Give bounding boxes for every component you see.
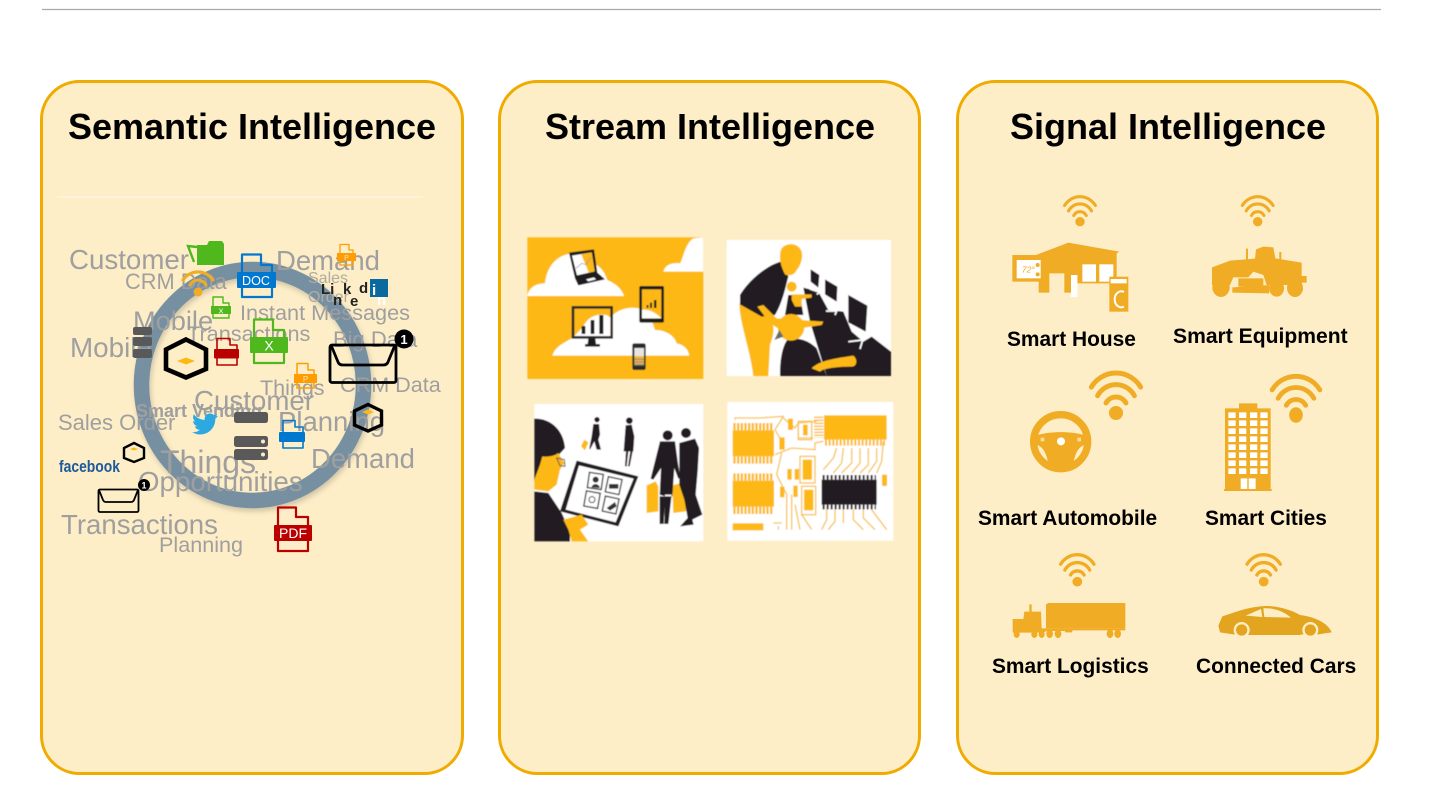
icon: LinkedIn scattered letters: k: [343, 281, 352, 298]
icon: office tower: [1224, 403, 1272, 491]
word cloud of data terms: Transactions: [187, 321, 311, 346]
icon: smart house: [1012, 243, 1128, 312]
icon: DOC file: DOC: [242, 273, 270, 288]
word cloud of data terms: Things: [160, 444, 256, 480]
word cloud of data terms: Customer: [69, 244, 189, 275]
word cloud of data terms: Transactions: [61, 509, 218, 540]
icon: smart equipment grader: [1212, 247, 1307, 297]
illustration: devices in the cloud: [527, 237, 703, 379]
panel: Semantic Intelligence: [42, 82, 462, 774]
illustration: tablet user and shoppers: [534, 404, 703, 541]
icon: large Excel file: [250, 320, 288, 363]
word cloud of data terms: Things: [260, 376, 325, 400]
icon: facebook wordmark: facebook: [59, 457, 120, 476]
icon: large hexagon: [166, 340, 206, 378]
label: Smart Equipment: Smart Equipment: [1173, 325, 1348, 348]
icon: wifi above house: [1065, 197, 1095, 226]
icon: DOC file: [237, 254, 276, 297]
word cloud of data terms: Demand: [276, 245, 380, 276]
icon: blue file: [279, 420, 305, 448]
icon: green briefcase: [188, 241, 224, 265]
word cloud of data terms: Instant Messages: [240, 300, 410, 325]
label: Smart Logistics: Smart Logistics: [992, 655, 1149, 678]
icon: connected car: [1218, 606, 1332, 638]
icon: small envelope with badge: 1: [141, 480, 147, 490]
icon: orange P file centre: P: [303, 375, 308, 384]
icon: orange P file centre: [294, 364, 317, 388]
icon: small Excel file: [211, 297, 231, 318]
label: Smart Automobile: Smart Automobile: [978, 507, 1157, 530]
icon: LinkedIn scattered letters: i: [372, 282, 376, 299]
icon: twitter bird: [192, 413, 218, 434]
icon: LinkedIn scattered letters: n: [333, 292, 342, 309]
word cloud of data terms: Planning: [278, 406, 385, 437]
icon: wifi above cities: [1272, 376, 1320, 423]
word cloud of data terms: Mobile: [70, 332, 152, 363]
icon: LinkedIn scattered letters: e: [350, 293, 358, 310]
icon: orange P file top: [337, 244, 356, 265]
word cloud of data terms: Demand: [311, 443, 415, 474]
word cloud of data terms: Order: [308, 289, 350, 306]
label: Smart House: Smart House: [1007, 328, 1136, 351]
word cloud of data terms: Big Data: [333, 327, 418, 352]
icon: large envelope with badge: [330, 330, 414, 382]
icon: truck: [1013, 603, 1125, 638]
heading: Signal Intelligence: Signal Intelligence: [1010, 106, 1326, 147]
icon: wifi above logistics: [1061, 555, 1094, 587]
word cloud of data terms: Mobile: [133, 305, 213, 336]
word cloud of data terms: CRM Data: [340, 372, 442, 397]
icon: wifi above equipment: [1242, 197, 1273, 226]
icon: server large: [234, 412, 268, 460]
word cloud of data terms: Opportunities: [138, 466, 303, 497]
icon: LinkedIn scattered letters: Li: [321, 281, 334, 298]
icon: large envelope with badge: 1: [400, 332, 408, 347]
word cloud of data terms: [58, 244, 442, 557]
ring graphic: [142, 270, 365, 504]
word cloud of data terms: Sales Order: [58, 410, 175, 435]
icon: large Excel file: X: [264, 338, 274, 354]
icon: right hexagon: [354, 404, 382, 431]
label: Connected Cars: Connected Cars: [1196, 655, 1356, 678]
icon: LinkedIn scattered letters: [321, 279, 388, 310]
icon: small Excel file: X: [218, 306, 224, 316]
icon: wifi above automobile: [1091, 373, 1141, 420]
icon: wifi above car: [1247, 555, 1280, 587]
illustration: people at monitors: [727, 240, 891, 376]
icon: wifi small: [183, 272, 213, 296]
word cloud of data terms: Customer: [194, 385, 314, 416]
icon: small envelope with badge: [98, 479, 150, 512]
icon: orange P file top: P: [344, 255, 349, 262]
icon: small hexagon: [124, 443, 144, 462]
panel: Stream Intelligence: [500, 82, 920, 774]
panel: Signal Intelligence: [958, 82, 1378, 774]
heading: Semantic Intelligence: Semantic Intelligence: [68, 106, 436, 147]
word cloud of data terms: CRM Data: [125, 269, 228, 294]
icon: PDF file: [274, 508, 312, 551]
word cloud of data terms: Sales: [308, 270, 348, 287]
icon: PDF file: PDF: [279, 526, 307, 541]
heading: Stream Intelligence: Stream Intelligence: [545, 106, 875, 147]
icon: smart house: 72°: [1022, 265, 1035, 275]
icon: red file: [214, 338, 239, 365]
icon: LinkedIn scattered letters: d: [359, 280, 368, 297]
word cloud of data terms: Planning: [159, 532, 243, 557]
illustration: circuit board: [727, 402, 893, 541]
icon: LinkedIn scattered letters: n: [377, 292, 386, 309]
label: Smart Cities: Smart Cities: [1205, 507, 1327, 530]
word cloud of data terms: Smart Vending: [136, 401, 262, 421]
icon: steering wheel: [1034, 415, 1088, 470]
icon: server small: [133, 327, 152, 358]
